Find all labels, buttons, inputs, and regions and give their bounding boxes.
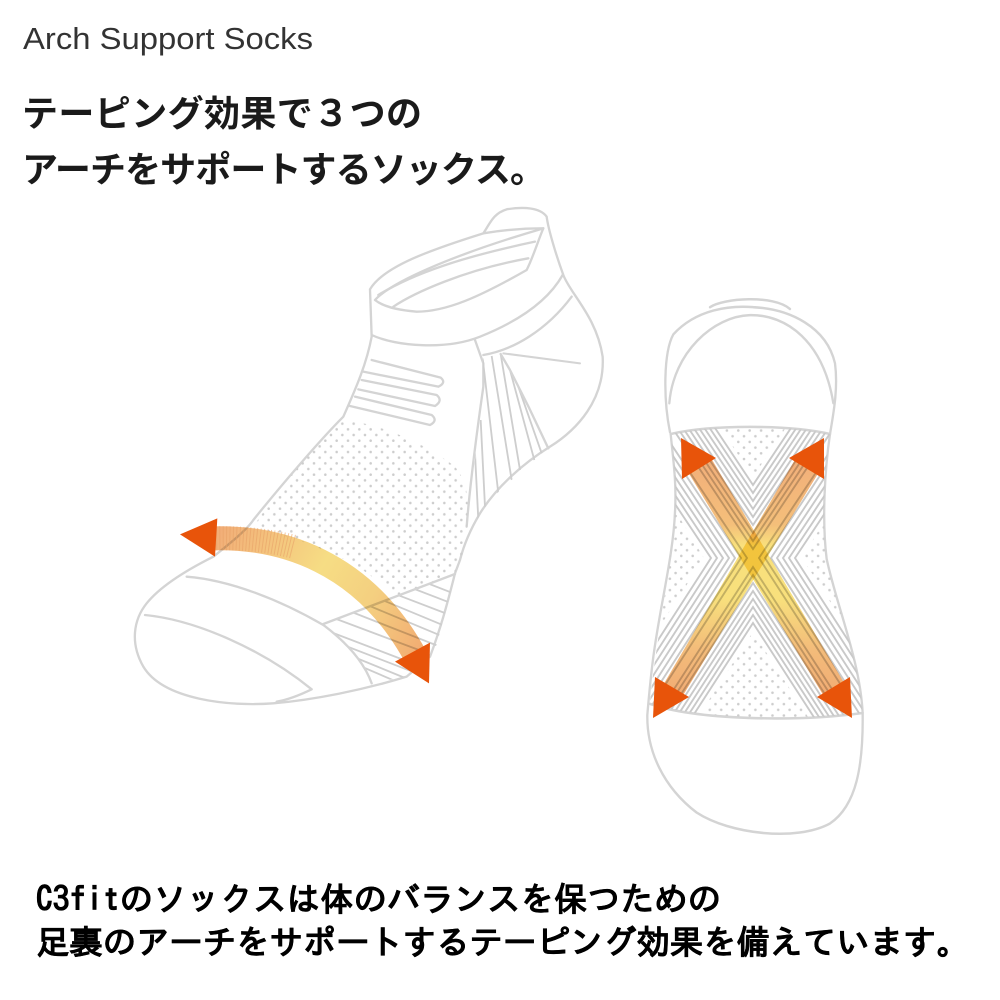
bottom description: C3fitのソックスは体のバランスを保つための	[36, 882, 721, 916]
top chevrons	[675, 428, 830, 550]
curved arch arrow	[180, 518, 430, 683]
sole outline	[647, 299, 863, 834]
heel hatching	[475, 354, 542, 520]
sole view sock illustration	[646, 298, 864, 835]
mesh dots	[662, 429, 840, 717]
heel panel edge	[501, 354, 548, 448]
title: Arch Support Socks: Arch Support Socks	[23, 22, 313, 56]
bottom description: 足裏のアーチをサポートするテーピング効果を備えています。	[36, 925, 970, 959]
ribbed instep bars	[350, 360, 443, 425]
sock outline	[135, 208, 603, 704]
left chevrons	[650, 444, 748, 704]
right chevrons	[758, 454, 862, 714]
sole mesh and chevron hatching	[650, 428, 862, 717]
bottom description	[36, 882, 970, 959]
dotted mesh panel	[253, 420, 468, 597]
heading: アーチをサポートするソックス。	[22, 149, 546, 190]
bottom chevrons	[670, 566, 844, 717]
toe seams	[145, 574, 455, 702]
cross arrows	[653, 438, 852, 718]
sock opening	[375, 228, 543, 312]
side view sock illustration	[135, 208, 603, 704]
heading: テーピング効果で３つの	[22, 93, 422, 134]
forefoot hatching	[334, 584, 450, 680]
heading	[22, 93, 546, 190]
cuff bands	[372, 275, 580, 527]
